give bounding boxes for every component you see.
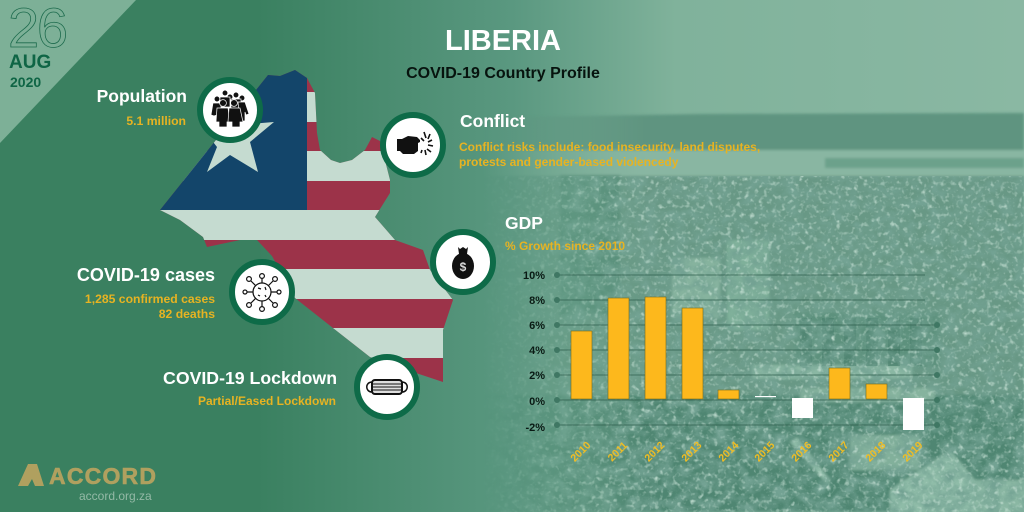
lockdown heading: COVID-19 Lockdown (163, 368, 337, 388)
lockdown block (163, 357, 417, 417)
cases values: 82 deaths (159, 307, 215, 321)
x axis years: 2011 (606, 439, 630, 464)
population heading: Population (97, 86, 187, 106)
logo: ACCORD (18, 463, 156, 503)
y axis labels: 10% (523, 270, 545, 282)
x axis years: 2013 (679, 439, 704, 464)
x axis years: 2010 (568, 439, 593, 464)
conflict heading: Conflict (460, 111, 525, 131)
y axis labels: 4% (529, 345, 545, 357)
icon: money bag: $ (460, 260, 467, 274)
x axis years: 2018 (863, 439, 888, 464)
GDP heading: GDP (505, 213, 543, 233)
conflict text: protests and gender-based violencedy (459, 155, 679, 169)
y axis labels: 0% (529, 396, 545, 408)
GDP subheading: % Growth since 2010 (505, 239, 625, 253)
bar chart: GDP growth (523, 270, 940, 464)
conflict block (383, 111, 760, 175)
chart gridlines (554, 272, 940, 428)
date: year: 2020 (10, 74, 41, 90)
x axis years: 2016 (789, 439, 814, 464)
y axis labels (523, 270, 545, 434)
cases heading: COVID-19 cases (77, 265, 215, 285)
population value: 5.1 million (126, 114, 186, 128)
y axis labels: 2% (529, 370, 545, 382)
subtitle: COVID-19 Country Profile (406, 65, 600, 82)
logo wordmark: ACCORD (49, 463, 156, 489)
negative bars (755, 396, 924, 430)
map: Liberia with flag (160, 70, 453, 382)
icon: people group (200, 80, 260, 140)
lockdown status: Partial/Eased Lockdown (198, 394, 336, 408)
y axis labels: -2% (525, 422, 545, 434)
logo url: accord.org.za (79, 489, 152, 503)
x axis years (568, 439, 925, 464)
GDP block (433, 213, 625, 292)
x axis years: 2015 (752, 439, 777, 464)
date: month: AUG (9, 52, 51, 73)
cases values: 1,285 confirmed cases (85, 292, 215, 306)
date corner triangle (0, 0, 136, 143)
title: LIBERIA (445, 25, 561, 57)
covid cases block (77, 262, 292, 322)
icon: money bag (433, 232, 493, 292)
positive bars (571, 297, 887, 399)
population block (97, 80, 260, 140)
x axis years: 2012 (642, 439, 667, 464)
logo mark (18, 464, 44, 486)
x axis years: 2017 (826, 439, 851, 464)
x axis years: 2019 (900, 439, 925, 464)
y axis labels: 6% (529, 320, 545, 332)
y axis labels: 8% (529, 295, 545, 307)
photo: Monrovia cityscape (470, 113, 1024, 512)
x axis years: 2014 (716, 439, 741, 464)
icon: fist (383, 115, 443, 175)
icon: virus (232, 262, 292, 322)
icon: face mask (357, 357, 417, 417)
conflict text: Conflict risks include: food insecurity, land disputes, (459, 140, 760, 154)
